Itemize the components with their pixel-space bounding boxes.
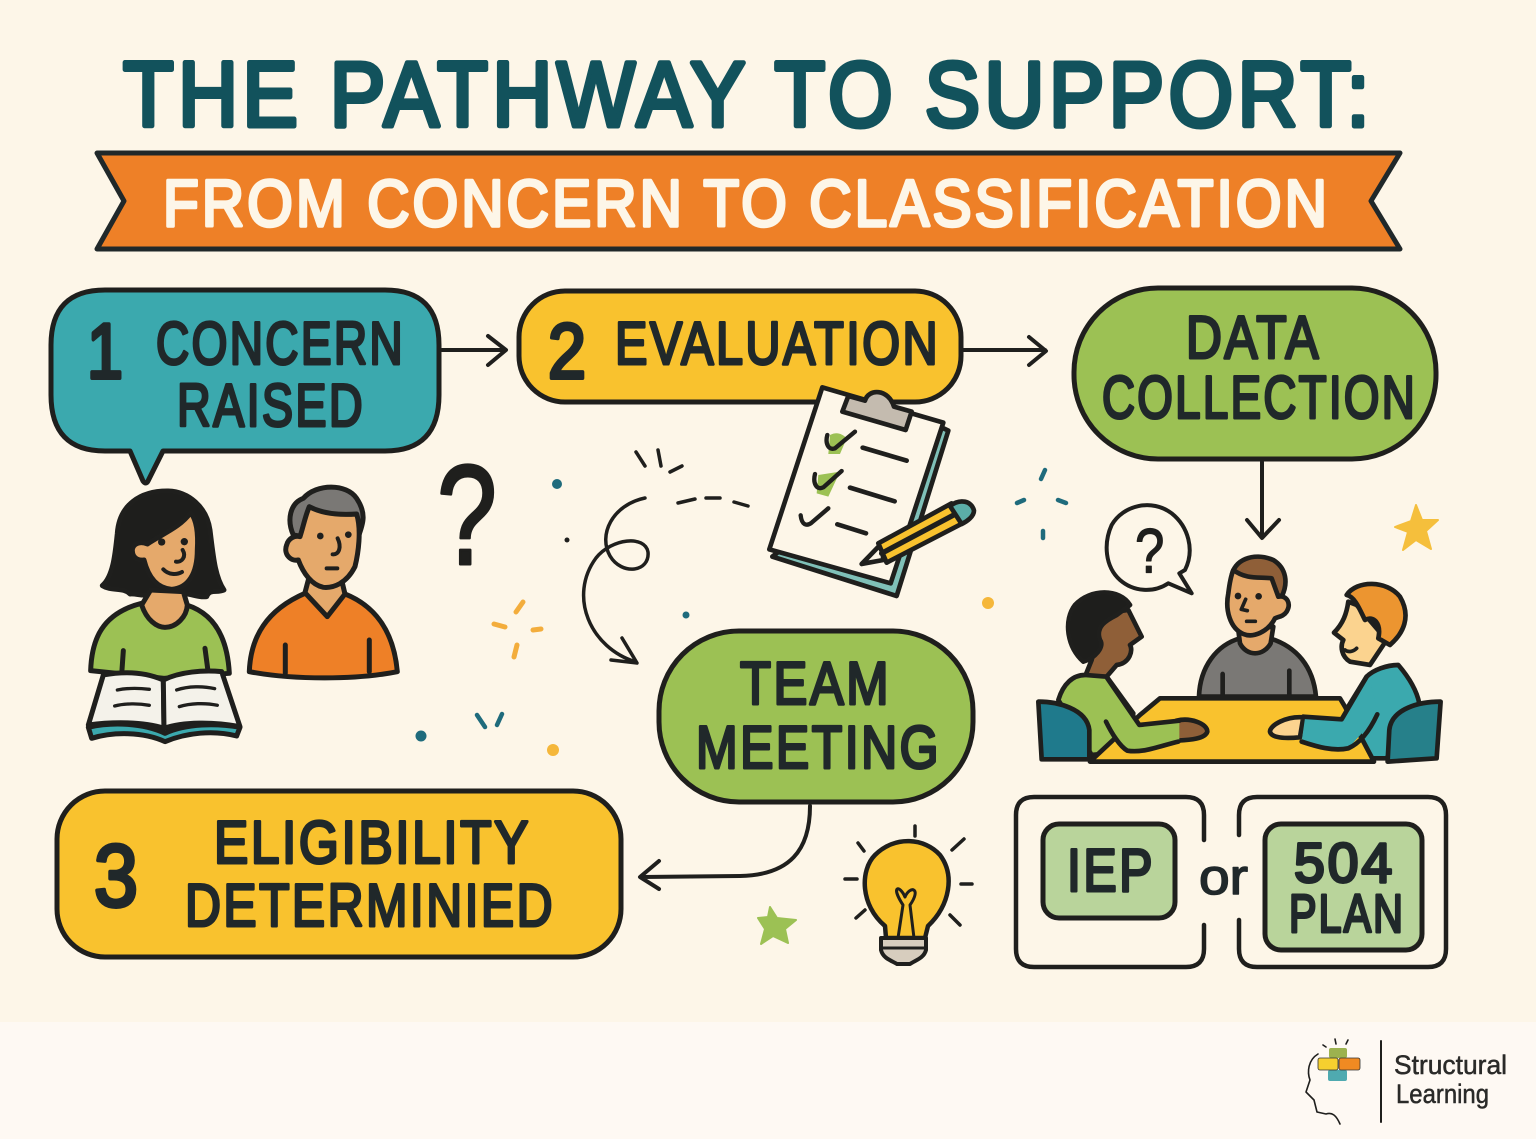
step 1: concern raised bubble [51,290,439,483]
man [249,487,397,678]
step 2: evaluation bubble: 2 [548,307,586,395]
arrow: curly path to team meeting [584,498,648,663]
chairs [1038,702,1441,762]
table [1090,698,1374,762]
banner: subtitle: FROM CONCERN TO CLASSIFICATION [163,166,1330,240]
panel: 504 plan option [1239,797,1446,967]
banner: subtitle [97,153,1400,249]
data collection bubble: DATA [1186,304,1321,371]
step 3: eligibility determined box: 3 [94,826,138,925]
icon: clipboard with pencil [769,387,974,596]
panel: 504 plan option: 504 [1294,831,1395,894]
step 1: concern raised bubble: 1 [87,307,123,395]
woman [88,491,240,742]
icon: sparkles teal [477,470,1066,727]
icon: lightbulb [845,826,972,964]
data collection bubble [1074,288,1436,459]
right arm and hand [1270,677,1378,749]
arrow: concern to evaluation [442,336,506,365]
icon: sparkles orange [494,602,541,657]
thought bubble with question [1107,505,1192,593]
panel: IEP option: IEP [1067,837,1155,904]
text: or: or [1199,849,1248,905]
icon: big question mark: ? [437,436,497,595]
panel: 504 plan option: PLAN [1289,884,1405,944]
step 3: eligibility determined box [57,791,621,957]
data collection bubble: COLLECTION [1102,364,1417,431]
thought bubble with question: ? [1135,517,1164,587]
left arm and hand [1097,678,1207,751]
team meeting bubble: TEAM [740,650,891,717]
person right [1334,584,1419,758]
logo: Structural Learning: Structural [1394,1050,1507,1080]
team meeting bubble [659,631,973,802]
logo: Structural Learning: Learning [1396,1079,1489,1109]
icon: green star [758,907,796,944]
arrow: team meeting to eligibility [640,806,810,889]
step 2: evaluation bubble [519,291,961,402]
step 3: eligibility determined box: ELIGIBILITY [214,809,531,876]
person centre [1199,557,1316,697]
team meeting bubble: MEETING [696,714,941,781]
arrow: evaluation to data collection [963,337,1046,365]
icon: sparkles top [636,450,682,472]
icon: yellow star [1395,505,1438,550]
step 2: evaluation bubble: EVALUATION [615,310,940,377]
panel: IEP option [1016,797,1204,967]
step 1: concern raised bubble: CONCERN [156,310,405,377]
step 3: eligibility determined box: DETERMINIED [185,872,555,939]
arrow: data collection to meeting [1247,462,1279,538]
dots [416,479,994,756]
icon: two people and book [88,487,397,742]
logo: Structural Learning [1306,1039,1507,1124]
icon: meeting scene [1038,505,1441,762]
title: THE PATHWAY TO SUPPORT: [123,44,1374,146]
person left [1058,592,1142,755]
dashed arrow trail [678,498,748,506]
step 1: concern raised bubble: RAISED [177,372,365,439]
